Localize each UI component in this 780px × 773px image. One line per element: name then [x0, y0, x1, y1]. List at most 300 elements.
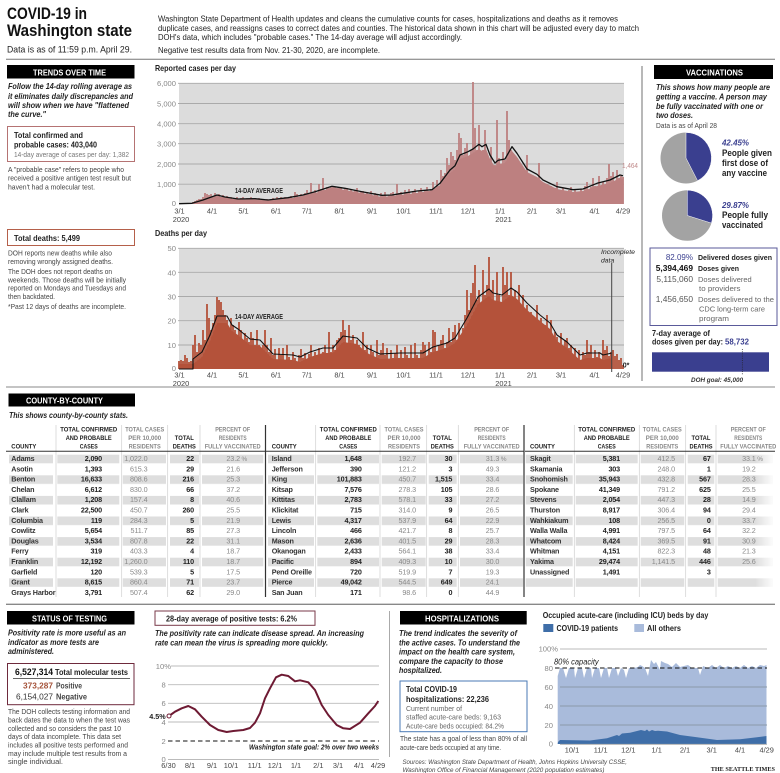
testing intro: indicator as more tests are	[8, 637, 99, 647]
panel: county-by-county	[6, 394, 776, 597]
table: Adams to Grays Harbor: 1,022.0	[124, 454, 148, 463]
table: Adams to Grays Harbor: 807.8	[130, 536, 148, 545]
deaths note	[7, 248, 126, 311]
heading: status of testing: STATUS OF TESTING	[32, 613, 107, 623]
testing note: may include multiple test results from a	[8, 749, 127, 758]
heading: status of testing	[7, 611, 134, 624]
table: Adams to Grays Harbor: Douglas	[11, 536, 39, 545]
chart: reported cases per day: 1,000	[157, 180, 176, 189]
callout: total cases	[8, 126, 134, 162]
chart: deaths per day: 20	[168, 316, 176, 326]
table: Island to San Juan: 121.2	[398, 464, 416, 473]
vaccinations intro	[655, 82, 770, 130]
chart: reported cases per day: 0	[172, 199, 176, 208]
chart: occupied acute-care beds: 60	[545, 683, 553, 692]
table: Adams to Grays Harbor: 808.6	[130, 475, 148, 484]
testing intro: Positivity rate is more useful as an	[8, 628, 126, 638]
table: Adams to Grays Harbor: 2,090	[85, 454, 102, 463]
table: Adams to Grays Harbor: 110	[183, 557, 194, 566]
chart: deaths per day: 4/1	[207, 370, 217, 380]
chart: occupied acute-care beds: 12/1	[621, 746, 635, 754]
table: Island to San Juan: 537.9	[398, 516, 416, 525]
table: Island to San Juan: 10	[445, 557, 452, 566]
table: Adams to Grays Harbor: PERCENT OF	[215, 427, 250, 434]
table: Island to San Juan: RESIDENTS	[388, 444, 420, 450]
table: Skagit to Unassigned: 48	[703, 547, 711, 556]
table: Island to San Juan: 715	[350, 506, 362, 514]
deaths 14-day average line	[179, 288, 612, 369]
table: Adams to Grays Harbor: 22	[186, 536, 194, 545]
table: Island to San Juan: 409.3	[398, 557, 416, 566]
testing intro: administered.	[8, 646, 54, 656]
testing note: includes all positive tests performed and	[8, 740, 128, 750]
table: Skagit to Unassigned: 14.9	[742, 495, 756, 504]
chart: occupied acute-care beds: 4/29	[760, 746, 774, 754]
table: Adams to Grays Harbor: 860.4	[130, 578, 148, 587]
table: Adams to Grays Harbor: 22,500	[81, 506, 102, 514]
table: Adams to Grays Harbor: 3,791	[85, 588, 102, 597]
table: Skagit to Unassigned: TOTAL CASES	[643, 427, 682, 434]
table: Island to San Juan: TOTAL CASES	[384, 427, 424, 434]
callout: total cases: probable cases: 403,040	[14, 140, 97, 150]
table: Adams to Grays Harbor: 8	[190, 495, 194, 504]
doses box: Delivered doses given	[698, 253, 772, 262]
table: Island to San Juan: Lincoln	[272, 526, 296, 535]
chart: positivity rate: 8/1	[185, 761, 195, 770]
deaths note: DOH reports new deaths while also	[8, 248, 112, 258]
table: Island to San Juan: 2,433	[344, 547, 362, 556]
first dose label: 42.45%	[721, 138, 749, 148]
chart: positivity rate: 6	[161, 699, 166, 708]
table: Island to San Juan: 49.3	[486, 464, 499, 473]
all others area	[558, 660, 766, 744]
table: Adams to Grays Harbor: COUNTY	[11, 444, 37, 450]
table: Skagit to Unassigned: 797.5	[658, 526, 675, 535]
chart: occupied acute-care beds: 4/1	[735, 746, 745, 754]
table: Skagit to Unassigned: RESIDENTS	[734, 435, 763, 442]
table: Adams to Grays Harbor: 18.7	[226, 547, 240, 556]
heading: county-by-county: COUNTY-BY-COUNTY	[26, 395, 103, 405]
chart: deaths per day: 3/1	[556, 370, 566, 380]
table: Skagit to Unassigned: 1	[707, 464, 711, 473]
table: Island to San Juan: Pierce	[272, 578, 293, 587]
chart: positivity rate: 0	[161, 755, 166, 764]
table: Island to San Juan: 278.3	[398, 485, 416, 494]
table: Island to San Juan: PER 10,000	[388, 435, 421, 442]
fully vaccinated label	[721, 200, 768, 230]
table: Adams to Grays Harbor: 3,534	[85, 536, 102, 545]
table: Adams to Grays Harbor: Asotin	[11, 464, 33, 473]
chart: deaths per day: 5/1	[238, 370, 249, 380]
table: Skagit to Unassigned: CASES	[598, 444, 616, 450]
table: Skagit to Unassigned: 30.9	[742, 536, 756, 545]
chart: deaths per day	[155, 229, 635, 388]
table: Island to San Juan: 564.1	[398, 547, 416, 556]
positivity intro: rate can mean the virus is spreading more quickly.	[155, 638, 328, 648]
table: Island to San Juan: 3	[448, 464, 452, 473]
first dose label	[721, 138, 772, 178]
fully vaccinated label: People fully	[722, 210, 768, 220]
chart: deaths per day: 12/1	[461, 370, 475, 380]
chart: deaths per day: 0*	[623, 362, 630, 370]
chart: reported cases per day: 4/29	[616, 206, 630, 216]
table: Skagit to Unassigned: AND PROBABLE	[584, 435, 630, 442]
table: Adams to Grays Harbor: CASES	[80, 444, 98, 450]
table: Island to San Juan: 98.6	[402, 588, 416, 597]
chart: occupied acute-care beds: 1/1	[652, 746, 662, 754]
intro text	[158, 14, 639, 55]
hospitalizations intro: The trend indicates the severity of	[399, 628, 518, 638]
table: Island to San Juan: %	[501, 456, 507, 463]
table: Adams to Grays Harbor: TOTAL CONFIRMED	[60, 427, 117, 434]
table: Adams to Grays Harbor: 29.0	[226, 588, 240, 597]
heading: trends over time: TRENDS OVER TIME	[33, 67, 106, 77]
table: Skagit to Unassigned: 432.8	[658, 475, 675, 484]
tests box: Positive	[56, 682, 82, 690]
table: Adams to Grays Harbor: 25.5	[226, 506, 240, 514]
hospitalizations box: staffed acute-care beds: 9,163	[406, 712, 501, 722]
credit: the seattle times: THE SEATTLE TIMES	[711, 766, 776, 773]
table: Skagit to Unassigned: 67	[703, 454, 711, 463]
panel: vaccinations	[650, 65, 777, 384]
table: Skagit to Unassigned: Yakima	[530, 557, 555, 566]
table: Island to San Juan: 49,042	[341, 578, 362, 587]
table: Adams to Grays Harbor: Grant	[11, 578, 30, 587]
callout: total cases: 14-day average of cases per day: 1,382	[14, 150, 129, 159]
doses per day bar: DOH goal: 45,000	[691, 377, 743, 384]
table: Island to San Juan: 421.7	[398, 526, 416, 535]
table: Adams to Grays Harbor: 12,192	[81, 557, 102, 566]
table: Skagit to Unassigned: Snohomish	[530, 475, 568, 484]
first dose label: first dose of	[722, 158, 768, 168]
panel: trends over time	[7, 65, 134, 311]
table: Skagit to Unassigned: TOTAL	[692, 435, 710, 442]
table: Island to San Juan: 2,783	[344, 495, 362, 504]
table: Skagit to Unassigned: 3	[707, 567, 711, 576]
chart: reported cases per day: 1,464	[622, 163, 638, 170]
7-day average label: 7-day average of	[652, 329, 710, 338]
table: Adams to Grays Harbor: RESIDENTS	[219, 435, 247, 442]
grid over area	[560, 687, 767, 725]
heading: hospitalizations: HOSPITALIZATIONS	[425, 614, 499, 624]
table: Adams to Grays Harbor: Clark	[11, 506, 29, 514]
chart: deaths per day: 50	[168, 244, 176, 253]
table: Skagit to Unassigned: 28	[703, 495, 711, 504]
tests box: 6,154,027	[16, 692, 53, 702]
deaths note: reported on Mondays and Tuesdays and	[8, 284, 126, 292]
table: Adams to Grays Harbor: 511.7	[131, 526, 148, 535]
chart: reported cases per day: 5/1	[238, 206, 249, 216]
chart: positivity rate: 10/1	[224, 761, 238, 770]
table: Skagit to Unassigned: Spokane	[530, 485, 559, 494]
table: Adams to Grays Harbor: 29	[186, 464, 194, 473]
testing note: back dates the data to when the test was	[8, 716, 130, 724]
chart: deaths per day: 14-DAY AVERAGE	[235, 314, 283, 321]
table: Adams to Grays Harbor: 8,615	[85, 578, 102, 587]
table: Adams to Grays Harbor: Clallam	[11, 495, 36, 504]
trends intro: the curve."	[8, 109, 47, 119]
table: Island to San Juan: 7	[448, 567, 452, 576]
deaths note: weekends. Those deaths will be initially	[7, 276, 126, 284]
table: Island to San Juan: 8	[448, 526, 452, 535]
chart: deaths per day: 1/1	[495, 370, 505, 380]
table: Island to San Juan: 519.9	[398, 567, 416, 576]
table: Island to San Juan: Pacific	[272, 557, 294, 566]
table: Skagit to Unassigned: Walla Walla	[530, 526, 569, 535]
table: Adams to Grays Harbor: %	[242, 456, 248, 463]
doses box: program	[699, 314, 729, 323]
chart: occupied acute-care beds: 2/1	[680, 746, 690, 754]
table: Adams to Grays Harbor: Franklin	[11, 557, 38, 566]
chart: deaths per day: 8/1	[334, 370, 345, 380]
table: Island to San Juan: 171	[350, 588, 362, 597]
chart: reported cases per day: 6,000	[157, 79, 176, 88]
chart: reported cases per day: 1/1	[495, 206, 505, 216]
table: Island to San Juan: 1,648	[344, 454, 362, 463]
chart: deaths per day: 9/1	[367, 370, 377, 380]
table: Adams to Grays Harbor: FULLY VACCINATED	[205, 444, 261, 450]
doses box: to providers	[699, 284, 741, 293]
heading: county-by-county	[8, 394, 135, 406]
table: Island to San Juan: San Juan	[272, 588, 302, 597]
vaccinations intro: two doses.	[656, 110, 693, 120]
table: Skagit to Unassigned: 25.5	[742, 485, 756, 494]
pie: fully vaccinated	[662, 190, 713, 241]
table: Skagit to Unassigned: COUNTY	[530, 444, 556, 450]
table: Island to San Juan: COUNTY	[272, 444, 297, 450]
table: Adams to Grays Harbor: 37.2	[226, 485, 240, 494]
table: Skagit to Unassigned: Whatcom	[530, 536, 561, 545]
table: Adams to Grays Harbor: 260	[182, 506, 194, 514]
doses box: 1,456,650	[656, 294, 693, 304]
title: COVID-19 in	[7, 5, 87, 23]
table: Adams to Grays Harbor: 62	[186, 588, 194, 597]
table: Adams to Grays Harbor: 21.6	[226, 464, 240, 473]
table: Adams to Grays Harbor: 450.7	[130, 506, 148, 514]
table: Island to San Juan: King	[272, 475, 287, 484]
panel: hospitalizations	[399, 611, 774, 754]
table: Island to San Juan: 192.7	[398, 454, 416, 463]
chart: deaths per day: 2020	[173, 379, 189, 388]
tests box: Negative	[56, 692, 88, 702]
chart: reported cases per day: 5,000	[157, 100, 176, 108]
hospitalizations intro	[399, 628, 520, 675]
doses box: 5,115,060	[656, 274, 693, 284]
table: Island to San Juan: 22.9	[486, 516, 499, 525]
table: Skagit to Unassigned: DEATHS	[690, 444, 713, 450]
table: Skagit to Unassigned: Skagit	[530, 454, 551, 463]
panel: status of testing	[7, 611, 385, 770]
chart: reported cases per day: 2/1	[527, 206, 537, 216]
chart: reported cases per day: 4/1	[589, 206, 600, 216]
chart: reported cases per day: 9/1	[367, 206, 377, 216]
deaths note: removing wrongly assigned deaths.	[8, 257, 113, 266]
chart: occupied acute-care beds: 80	[545, 664, 553, 673]
chart: positivity rate: 6/30	[161, 761, 176, 770]
table: Island to San Juan: 33.4	[486, 475, 499, 484]
table: Adams to Grays Harbor: 1,208	[85, 495, 102, 504]
chart: reported cases per day: 10/1	[396, 206, 411, 216]
7-day average label	[652, 329, 750, 346]
chart: reported cases per day: 3,000	[157, 140, 176, 148]
table: Skagit to Unassigned: Thurston	[530, 506, 560, 514]
vaccinations intro: Data is as of April 28	[656, 121, 717, 130]
chart: reported cases per day: 8/1	[334, 206, 345, 216]
chart: deaths per day: Deaths per day	[155, 229, 207, 238]
table: Island to San Juan: 44.9	[486, 588, 499, 597]
chart: reported cases per day: 3/1	[556, 206, 566, 216]
deaths note: The DOH does not report deaths on	[8, 267, 112, 276]
tests box: 373,287	[23, 680, 53, 690]
table: Adams to Grays Harbor: 216	[182, 475, 194, 484]
doses box: Doses given	[698, 264, 739, 273]
chart: occupied acute-care beds: 0	[549, 740, 553, 748]
intro text: Washington State Department of Health updates and cleans the cumulative counts for cases, hospitalizations and deaths as it removes	[158, 14, 618, 24]
table: Island to San Juan: Kitsap	[272, 485, 294, 494]
hospitalizations intro: the active cases. To understand the	[399, 638, 520, 648]
table: Island to San Juan: FULLY VACCINATED	[464, 444, 520, 450]
table: Island to San Juan: TOTAL CONFIRMED	[320, 427, 377, 434]
testing note: collected and so considers the past 10	[8, 724, 121, 733]
table: Skagit to Unassigned: 447.3	[658, 495, 675, 504]
chart: reported cases per day	[155, 64, 638, 224]
table: Island to San Juan: Lewis	[272, 516, 291, 525]
table: Island to San Juan: 390	[350, 464, 362, 473]
table: Adams to Grays Harbor: 6,612	[85, 485, 102, 494]
chart: positivity rate: 8	[161, 680, 166, 690]
doses box: CDC long-term care	[699, 304, 765, 314]
table: Island to San Juan: 19.3	[486, 567, 499, 576]
table: Skagit to Unassigned: 5,381	[603, 454, 620, 463]
heading: hospitalizations	[400, 611, 527, 624]
table: Skagit to Unassigned: 29.4	[742, 506, 756, 514]
chart: positivity rate: 1/1	[291, 761, 301, 770]
table: Adams to Grays Harbor: 18.7	[226, 557, 240, 566]
heading: vaccinations	[654, 65, 773, 79]
chart: deaths per day: 4/1	[589, 370, 600, 380]
table: Skagit to Unassigned: 256.5	[658, 516, 675, 525]
table: Skagit to Unassigned: 91	[703, 536, 711, 545]
callout: total deaths	[8, 230, 134, 246]
table: Adams to Grays Harbor: 5,654	[85, 526, 102, 535]
chart: deaths per day: 2/1	[527, 370, 537, 380]
80% capacity line	[555, 667, 767, 669]
chart: positivity rate: 4/29	[371, 761, 385, 770]
deaths note: *Past 12 days of deaths are incomplete.	[8, 302, 126, 311]
table: Island to San Juan: 31.3	[486, 454, 499, 463]
chart: reported cases per day: 12/1	[461, 206, 475, 216]
table: Island to San Juan: 105	[441, 485, 452, 494]
fully vaccinated label: vaccinated	[722, 220, 763, 230]
intro text: duplicate cases, and reassigns cases to correct dates and counties. The historical data shown in this chart will be adjusted every day to match	[158, 24, 639, 33]
callout: positivity average: 28-day average of positive tests: 6.2%	[166, 614, 297, 624]
table: Island to San Juan: 27.2	[486, 495, 499, 504]
table: Adams to Grays Harbor: 507.4	[130, 588, 148, 597]
incomplete data marker: Incomplete	[601, 249, 635, 256]
table: Adams to Grays Harbor: 23.7	[226, 578, 240, 587]
chart: reported cases per day: 11/1	[429, 206, 443, 216]
chart: positivity rate: 2	[161, 737, 166, 746]
sources	[402, 759, 627, 773]
table: Adams to Grays Harbor: Columbia	[11, 516, 44, 525]
chart: deaths per day: 30	[168, 292, 176, 302]
table: Skagit to Unassigned: 306.4	[658, 506, 675, 514]
title	[7, 5, 132, 40]
table: Adams to Grays Harbor: 830.0	[130, 485, 148, 494]
fully vaccinated label: 29.87%	[721, 200, 749, 210]
table: Skagit to Unassigned: 108	[608, 516, 620, 525]
table: Island to San Juan: 1,515	[435, 475, 452, 484]
testing note: days of data incomplete. This data set	[8, 732, 121, 741]
chart: positivity rate: 4/1	[354, 761, 364, 770]
chart: deaths per day: 40	[168, 268, 176, 278]
table: Skagit to Unassigned: RESIDENTS	[646, 444, 679, 450]
table: Island to San Juan: 2,636	[344, 536, 362, 545]
table: Skagit to Unassigned: 21.3	[742, 547, 756, 556]
table: Adams to Grays Harbor: Garfield	[11, 567, 37, 576]
table: Adams to Grays Harbor: 71	[186, 578, 194, 587]
table: Island to San Juan: 578.1	[398, 495, 416, 504]
chart: occupied acute-care beds: 3/1	[707, 746, 717, 754]
chart: occupied acute-care beds: 80% capacity	[554, 658, 600, 667]
table: Adams to Grays Harbor: 85	[186, 526, 194, 535]
trends intro: it eliminates daily discrepancies and	[8, 91, 134, 101]
heading: trends over time	[7, 65, 134, 78]
chart: deaths per day: 6/1	[271, 370, 281, 380]
chart: positivity rate: 10%	[156, 662, 171, 671]
chart: positivity rate: 2/1	[313, 761, 323, 770]
table: Skagit to Unassigned: TOTAL CONFIRMED	[578, 427, 635, 434]
chart: occupied acute-care beds: 20	[545, 721, 553, 730]
legend: COVID-19 patients	[556, 624, 618, 633]
table: Adams to Grays Harbor: 22	[186, 454, 194, 463]
table: Skagit to Unassigned: 19.2	[742, 464, 756, 473]
table: Adams to Grays Harbor: 319	[90, 547, 102, 556]
table: Skagit to Unassigned: 0	[707, 516, 711, 525]
table: Adams to Grays Harbor: 31.1	[226, 536, 240, 545]
chart: reported cases per day: 7/1	[302, 206, 312, 216]
trends intro: Follow the 14-day rolling average as	[8, 81, 132, 91]
table: Adams to Grays Harbor: 66	[186, 485, 194, 494]
table: Adams to Grays Harbor: DEATHS	[173, 444, 196, 450]
table: Island to San Juan: Jefferson	[272, 464, 303, 473]
table: Skagit to Unassigned: 791.2	[658, 485, 675, 494]
table: Island to San Juan: 26.5	[486, 506, 499, 514]
table: Skagit to Unassigned: 33.7	[742, 516, 756, 525]
table: Adams to Grays Harbor: 27.3	[226, 526, 240, 535]
table: Island to San Juan: 544.5	[398, 578, 416, 587]
table: Island to San Juan: 450.7	[398, 475, 416, 484]
deaths bars	[179, 257, 623, 369]
table: Skagit to Unassigned: 1,491	[603, 567, 620, 576]
7-day average label: 58,732	[725, 338, 750, 346]
vaccinations intro: be fully vaccinated with one or	[656, 101, 764, 111]
table: Island to San Juan: 28.6	[486, 485, 499, 494]
chart: positivity rate	[149, 662, 385, 770]
incomplete data marker	[601, 249, 635, 372]
deaths area under average	[179, 295, 612, 369]
county intro: This shows county-by-county stats.	[9, 411, 128, 420]
7-day average label: doses given per day:	[652, 338, 723, 346]
table: Island to San Juan: 30.0	[486, 557, 499, 566]
chart: occupied acute-care beds	[539, 611, 774, 754]
table: Island to San Juan: 720	[350, 567, 362, 576]
table: Skagit to Unassigned: 446	[699, 557, 711, 566]
table: Skagit to Unassigned: Wahkiakum	[530, 516, 568, 525]
chart: reported cases per day: 2,000	[157, 160, 176, 169]
table: Skagit to Unassigned: 822.3	[658, 547, 675, 556]
tests box	[8, 664, 134, 705]
